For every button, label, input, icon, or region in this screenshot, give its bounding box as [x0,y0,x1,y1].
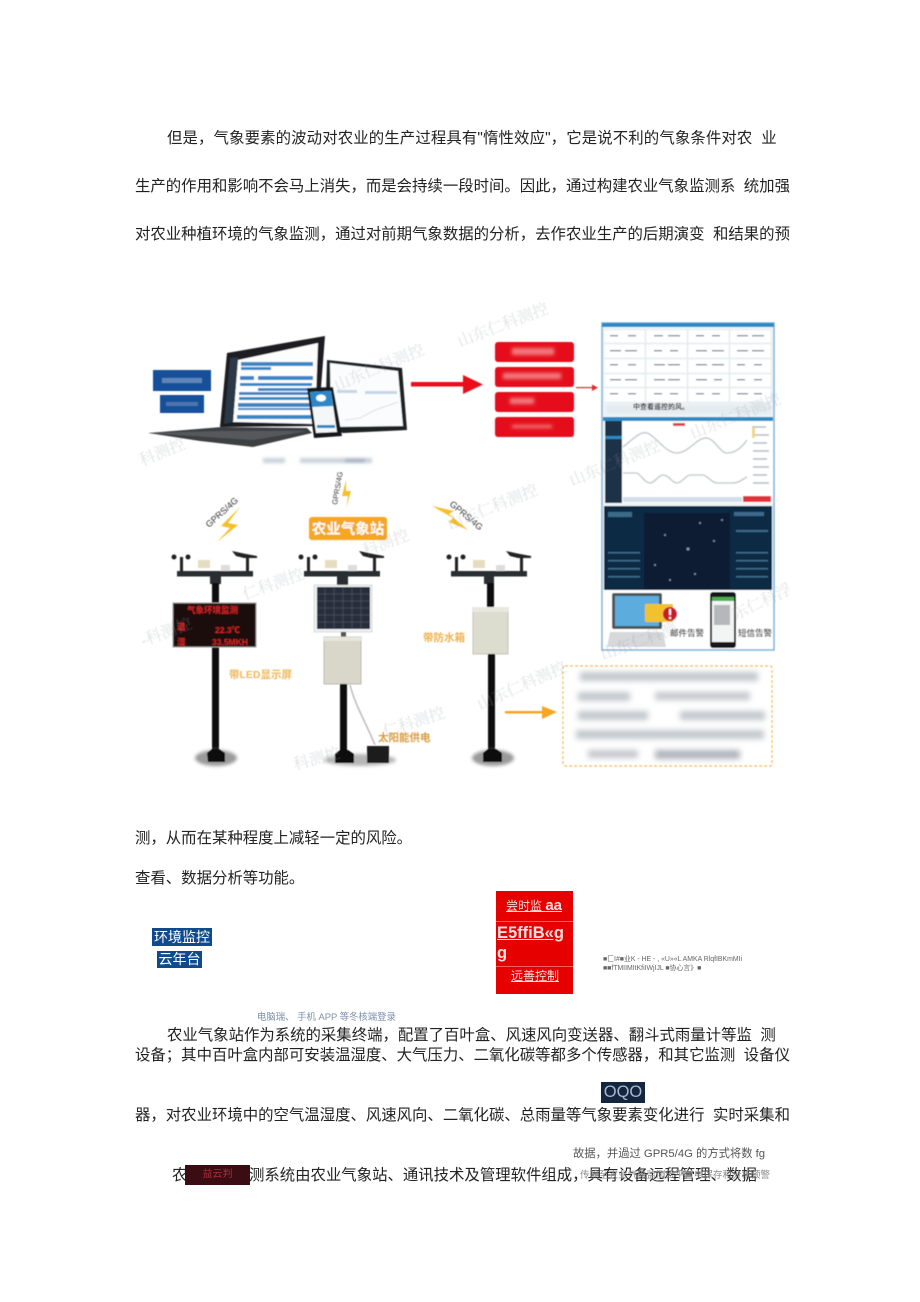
watermarks: 山东仁科测控 [474,658,569,714]
lightning GPRS left: GPRS/4G [204,495,240,529]
weather station: waterproof box [446,551,531,766]
dashed callout with blurred text [563,666,772,766]
dark red label overlay: 益云判 [202,1169,232,1180]
menu divider 2 [496,966,573,967]
label: SMS alert: 短信告警 [738,628,773,638]
icon: SMS alert phone [710,592,736,648]
text: data transfer fragment: 故据，并過过 GPR5/4G 的方式将数 fg [573,1148,765,1160]
blue labels beside laptop [153,370,211,413]
screenshot overlay caption: 中查看遥控的风。 [633,402,689,411]
label: cloud platform: 云年台 [158,951,200,967]
watermarks: -科测控 [138,615,194,650]
menu item: real-time monitoring: 尝时监 aa [506,897,562,914]
watermarks: 仁科测控 [240,565,307,604]
badge: agricultural weather station: 农业气象站 [312,520,385,538]
watermarks: 山东仁科测控 [332,341,427,395]
weather station: LED display: 33.5MKH [212,637,248,647]
watermarks: 山东仁科测控 [455,300,551,351]
label: email alert: 邮件告警 [670,628,705,638]
diagram contents [137,300,795,774]
lightning GPRS right: GPRS/4G [448,499,485,532]
watermarks: 仁科测控 [381,704,447,741]
software screenshots panel [602,323,774,650]
paragraph: inertia effect line 1: 但是，气象要素的波动对农业的生产过程具有"惰性效应"，它是说不利的气象条件对农 业 [167,130,777,147]
menu item: garbled heading: E5ffiB«g [497,924,564,942]
arrow: large red [411,375,483,394]
watermarks [137,300,795,774]
menu item: garbled letter: g [497,944,507,962]
paragraph: station line 2: 设备；其中百叶盒内部可安装温湿度、大气压力、二氧化碳等都多个传感器，和其它监测 设备仪 [135,1047,790,1064]
paragraph: inertia effect line 3: 对农业种植环境的气象监测，通过对前期气象数据的分析，去作农业生产的后期演变 和结果的预 [135,226,790,243]
icon: laptop with dashboard [148,336,407,447]
label: with LED display: 带LED显示屏 [229,668,292,681]
watermarks: 科测控 [137,435,188,470]
dark dashboard screenshot [604,506,772,590]
label: environment monitoring: 环境监控 [154,929,210,945]
arrow: orange [505,706,557,719]
watermarks: 山东仁科测控 [445,481,541,534]
lightning GPRS centre [330,471,351,508]
red feature menu [496,891,573,994]
weather station: LED display [172,551,257,766]
paragraph: station line 3: 器，对农业环境中的空气温湿度、风速风向、二氧化碳、总雨量等气象要素变化进行 实时采集和 [135,1107,790,1124]
icon: email alert [607,593,677,647]
label: solar power: 太阳能供电 [378,731,431,744]
watermarks: 山东仁科测控 [567,437,663,490]
watermarks: 山东仁科测控 [688,390,784,443]
weather station: LED display: 温 [177,622,186,632]
text: data analysis line: 查看、数据分析等功能。 [135,870,304,887]
text: login caption: 电脑瑞、 手机 APP 等冬核端登录 [257,1011,396,1022]
system diagram image [137,300,790,774]
dark red label overlay [185,1165,250,1185]
weather station: LED display: 气象环境监测 [187,605,238,615]
weather station: LED display: 湿 [177,637,186,647]
line chart screenshot [604,421,773,503]
device status grid screenshot [604,330,771,414]
blurred caption under laptop [263,458,372,463]
watermarks: 科测控 [360,526,411,560]
overlapped small text: 传输至农业气象监测云平台中保存和分析预警 [580,1170,770,1181]
watermarks: 科测控 [291,744,342,774]
weather station: LED display: 22.3℃ [215,625,241,635]
paragraph: inertia effect line 2: 生产的作用和影响不会马上消失，而是会持续一段时间。因此，通过构建农业气象监测系 统加强 [135,178,790,195]
arrow: small red [576,384,598,391]
badge: agricultural weather station [309,517,387,540]
menu divider 1 [496,921,573,922]
label: waterproof box: 带防水箱 [423,631,465,644]
paragraph: system composition: 农业气象监测系统由农业气象站、通讯技术及管理软件组成，具有设备远程管理、数据 [172,1167,757,1184]
red function buttons [495,342,574,437]
lightning GPRS centre: GPRS/4G [330,471,345,505]
dark badge OQO: OQO [604,1083,642,1101]
garbled small text: ■匚I#■业K - HE - , «U»«L AMKA RlqfIBKmMIi ■■fTMIIMItKfiIWjIJL ■协心言》■ [603,956,742,972]
weather station: solar panel [298,551,396,766]
watermarks: 山东仁科测 [598,619,680,664]
paragraph: station line 1: 农业气象站作为系统的采集终端，配置了百叶盒、风速风向变送器、翻斗式雨量计等监 测 [167,1027,776,1044]
text: risk line: 测，从而在某种程度上减轻一定的风险。 [135,830,412,847]
menu item: remote control: 远善控制 [511,969,559,983]
